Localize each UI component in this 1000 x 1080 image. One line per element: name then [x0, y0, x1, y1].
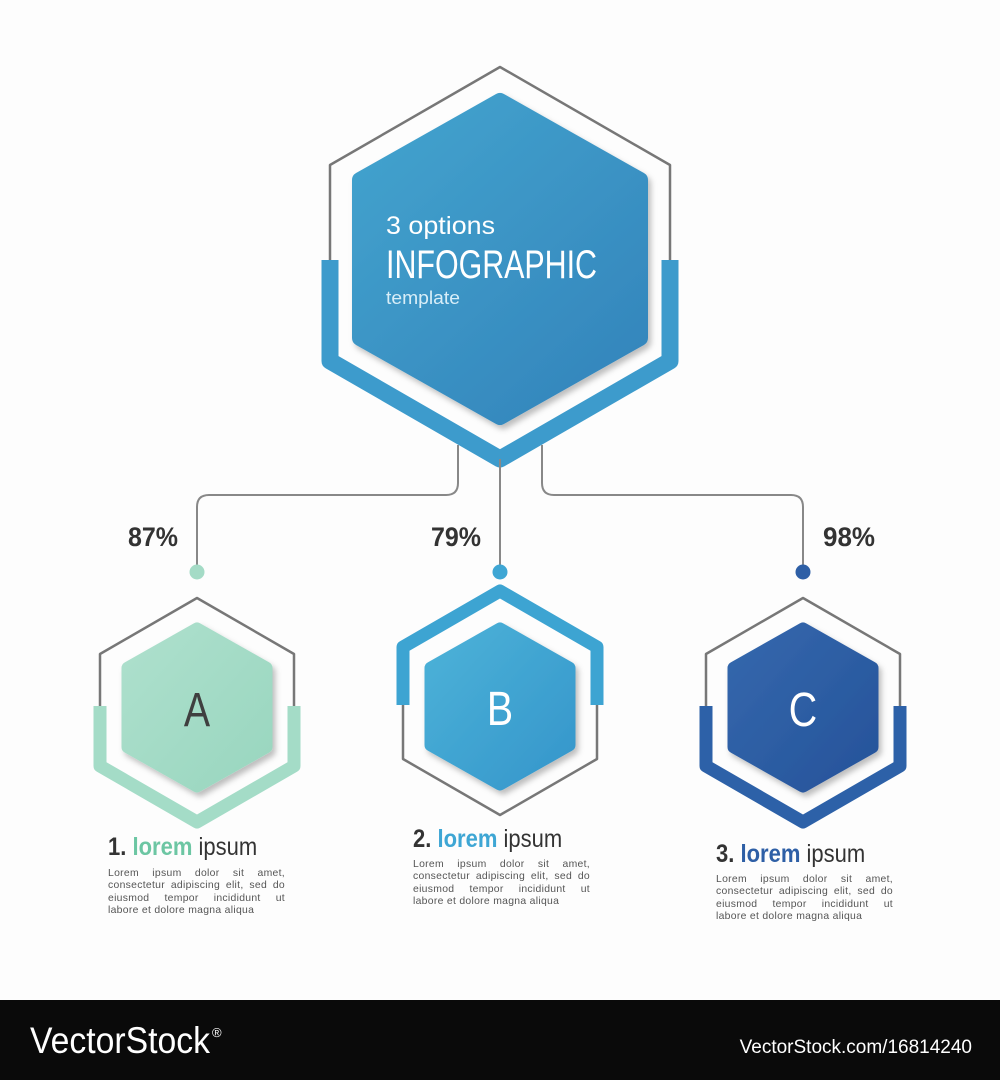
main title text — [386, 212, 597, 308]
option 1 text: labore et dolore magna aliqua — [108, 905, 254, 916]
percentages: 79% — [431, 522, 481, 552]
option 1 title: 1. lorem ipsum — [108, 833, 257, 861]
option 1 text — [108, 868, 285, 916]
percentages: 98% — [823, 522, 875, 552]
dots — [190, 564, 810, 580]
option 1 text: consectetur adipiscing elit, sed do — [108, 880, 285, 891]
percentages: 87% — [128, 522, 178, 552]
percentages — [128, 522, 875, 552]
option 2 text: labore et dolore magna aliqua — [413, 896, 559, 907]
hexagon B — [403, 591, 597, 815]
option 2 text: Lorem ipsum dolor sit amet, — [413, 859, 590, 870]
option 2 text: consectetur adipiscing elit, sed do — [413, 871, 590, 882]
option 3 text: eiusmod tempor incididunt ut — [716, 899, 893, 910]
watermark bar: ® — [212, 1025, 222, 1040]
option 3 text: labore et dolore magna aliqua — [716, 911, 862, 922]
option 3 text — [716, 874, 893, 922]
option 1 text: Lorem ipsum dolor sit amet, — [108, 868, 285, 879]
connector lines — [197, 445, 803, 565]
watermark bar: VectorStock.com/16814240 — [740, 1037, 972, 1058]
main title text: template — [386, 288, 460, 308]
hexagon A — [100, 598, 294, 822]
watermark bar: VectorStock — [30, 1020, 210, 1061]
option 1 text: eiusmod tempor incididunt ut — [108, 893, 285, 904]
main hexagon — [330, 67, 670, 459]
hexagon C: C — [789, 683, 817, 737]
option 2 text — [413, 859, 590, 907]
main title text: 3 options — [386, 212, 495, 240]
option 3 text: Lorem ipsum dolor sit amet, — [716, 874, 893, 885]
hexagon C — [706, 598, 900, 822]
hexagon A: A — [184, 683, 211, 737]
main title text: INFOGRAPHIC — [386, 243, 597, 287]
hexagon B: B — [487, 682, 513, 736]
option 3 title: 3. lorem ipsum — [716, 840, 865, 868]
watermark bar — [0, 1000, 1000, 1080]
option 2 text: eiusmod tempor incididunt ut — [413, 884, 590, 895]
option 2 title: 2. lorem ipsum — [413, 825, 562, 853]
option 3 text: consectetur adipiscing elit, sed do — [716, 886, 893, 897]
